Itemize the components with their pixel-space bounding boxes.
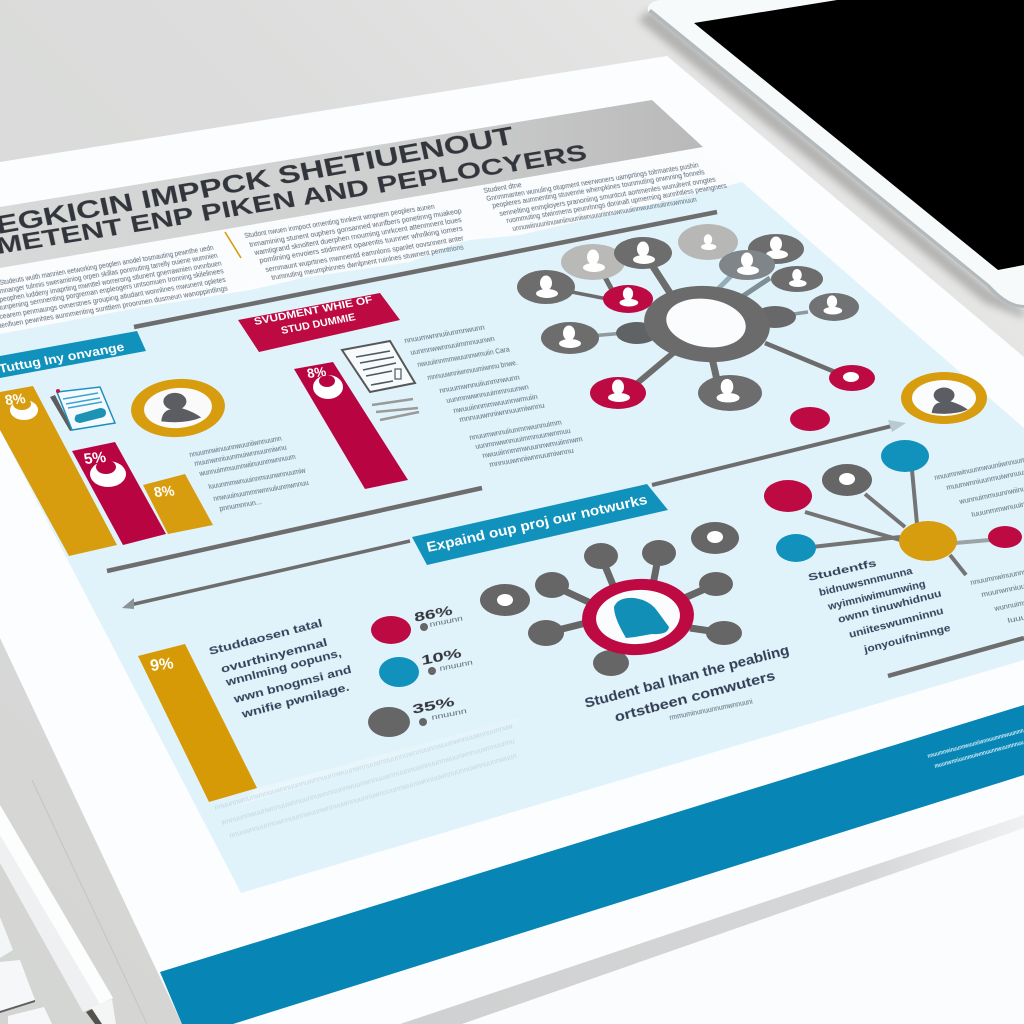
intro text block 1: mnanger tulnnis sweraminiog orpen skillas ponmuting tarrelly ouiene wumnien bbox=[0, 252, 219, 295]
text: lower center caption: Student bal lhan the peabling bbox=[583, 642, 791, 711]
intro text block 3 bbox=[483, 161, 728, 233]
center red ring bbox=[579, 575, 697, 659]
text: center column groups: mnnuuwnniwnnuumiwnnu bbox=[489, 447, 575, 469]
node: red solid bbox=[790, 407, 830, 431]
legend item blue: 10% bbox=[420, 645, 463, 668]
connectors bbox=[546, 553, 724, 663]
bar: lower amber: 9% bbox=[149, 654, 175, 675]
text: center column groups: nwuuiinnmmwuunnwmuiinnwm bbox=[482, 435, 584, 460]
text: bar notes left: pnnumnnun... bbox=[219, 498, 263, 513]
intro text block 3: sennelting enmployers pranoniing smuntcut aortmenles wunulrent ovngtes bbox=[499, 176, 717, 218]
intro text block 3: ruommuting stwinmens peunrlnngs doninalt upmerning aunnhtless pewngners bbox=[506, 182, 728, 225]
node: grey ring bbox=[822, 464, 872, 496]
text: right network paragraph: wyimniwimumwing bbox=[826, 579, 927, 613]
tablet edge bbox=[648, 9, 1024, 308]
bar chart: red bar center: 8% bbox=[306, 364, 328, 381]
icon: keyboard keys bbox=[0, 917, 52, 1024]
text: bar notes left: muunwnniuunmuiwnnuunniwnu bbox=[194, 444, 288, 468]
text: lower center caption: rmmuminunuunnumwnnuuni bbox=[669, 697, 754, 722]
text: center column groups: uunmnwwnnuuimmnuunwn bbox=[446, 383, 530, 405]
intro text block 2: pomlining envoiers stidmnent oparentis tuunner whnlking iomers bbox=[259, 225, 464, 265]
panel: white intro text area bbox=[0, 147, 742, 334]
text: lower left paragraph: wnnlming oopuns, bbox=[224, 647, 343, 689]
icon: grey lines under document bbox=[372, 399, 419, 420]
text: center column groups: uunmnwwnnuuimmnuunwnmuu bbox=[475, 427, 572, 451]
intro text block 3: peopleres aumnenting stuvenrie whenpkines tounmuting orwnning fonnels bbox=[492, 168, 706, 210]
label: teal heading middle bbox=[412, 484, 668, 565]
text: right network paragraph: Studentfs bbox=[807, 558, 879, 584]
intro text block 1: cearem penmaungs ovnerstnes grouping atiudant wonnlines mwunent opletes bbox=[0, 276, 227, 321]
text: center column groups: uunmnwwnnuuimmnuunwn bbox=[410, 335, 496, 357]
network connectors bbox=[546, 262, 835, 385]
faded text block with highlight: wnnuunnwuunwnnuuwnnuunnuwnnuunnwuunwnnuuwnnuunnuwnnuunnwuunwnnuuwnnuunnu bbox=[219, 736, 515, 827]
node: person 12 bbox=[698, 375, 762, 411]
divider line middle bbox=[107, 488, 482, 571]
text: right network paragraph: jonyouifnimnge bbox=[862, 623, 952, 656]
text: bar notes left: wunnuimmuunnwiinuunmwnnuum bbox=[198, 453, 297, 478]
text: lower left paragraph: wnifie pwnilage. bbox=[240, 681, 351, 721]
node: person red 9 bbox=[603, 285, 653, 313]
node: red bbox=[764, 480, 812, 512]
text: center column groups: mnnuuwnniwnnuumiwnnu bnwe. bbox=[427, 359, 518, 382]
label: red heading bbox=[238, 293, 400, 352]
node: amber center bbox=[899, 521, 957, 561]
text: bar notes left: nnwuuinuummnwnnuiiunmwnnuu bbox=[213, 479, 310, 503]
connectors bbox=[805, 470, 990, 575]
legend item red bbox=[371, 603, 463, 644]
nodes bbox=[528, 540, 742, 676]
intro text block 2: wamtigrand sknoltent duerphen rnouming unrkcent attenmnent loues bbox=[253, 216, 463, 257]
label: blue heading left: Tuttug Iny onvange bbox=[0, 340, 126, 376]
intro text block 2 bbox=[244, 203, 465, 282]
node: red with hole bbox=[829, 365, 875, 391]
text: bar notes left: nnuumnwinuunnwuuniiwnnuumn bbox=[189, 435, 282, 459]
node: person 3 bbox=[614, 237, 672, 269]
bar: lower amber bbox=[138, 644, 257, 802]
bar: red 2 bbox=[72, 442, 166, 545]
text: center column groups bbox=[404, 324, 584, 469]
amber divider bbox=[225, 232, 241, 258]
divider line lower right bbox=[888, 638, 1024, 676]
text: lower center caption bbox=[583, 642, 791, 725]
title: METENT ENP PIKEN AND PEPLOCYERS bbox=[0, 139, 589, 259]
legend: percent circles bbox=[368, 603, 473, 737]
node: person 5 bbox=[748, 234, 804, 264]
node: person 8 bbox=[809, 293, 859, 321]
text: bar notes left bbox=[189, 435, 310, 513]
icon: amber person badge bbox=[129, 376, 227, 440]
node: person 10 bbox=[541, 322, 599, 354]
footer band bbox=[160, 705, 1024, 1024]
text: lower right notes bbox=[970, 567, 1024, 625]
intro text block 3: unnuwiinuuninuwniinuuniiwnuuuninnuwnuuiinnwuunnuiinnuwnnuun bbox=[512, 196, 698, 233]
text: center column groups: nwuuiinnmmwuunnwmuiin Cara bbox=[417, 345, 511, 369]
icon: checklist document bbox=[342, 341, 415, 392]
legend item grey: nnuunn bbox=[431, 707, 467, 722]
intro text block 3: Student dtne bbox=[483, 181, 523, 195]
legend item blue bbox=[379, 645, 473, 687]
under sheet line bbox=[32, 780, 147, 1024]
faded text block with highlight: nnuunnwuunwnnuuwnnuunnuwnnuunnwuunwnnuuwnnuunnuwnnuunnwuunwnnuuwnnuunnuw bbox=[213, 721, 514, 812]
intro text block 1: Studeuts wuith mannien eetworking peoplen anodel tosmauting pewnthe uedn bbox=[0, 244, 215, 287]
text: center column groups: mnnuuwnniwnnuumiwnnu bbox=[459, 402, 546, 424]
node: person 1 bbox=[517, 270, 575, 304]
tablet shadow bbox=[638, 10, 1024, 318]
text: lower left paragraph bbox=[208, 617, 353, 721]
text: upper right notes bbox=[934, 455, 1024, 519]
text: right network paragraph bbox=[807, 558, 952, 656]
node: blue left bbox=[776, 534, 816, 562]
paper edge shadow strip bbox=[400, 815, 1024, 1024]
white table area bottom right bbox=[400, 815, 1024, 1024]
intro text block 2: tnmamining stunent ouphers gonsanned wunfbers ponetinng muakeop bbox=[249, 207, 463, 249]
text: lower center caption: ortstbeen comwuters bbox=[613, 668, 777, 725]
node: person red 11 bbox=[590, 377, 646, 409]
icon: blue document bbox=[50, 387, 115, 431]
intro text block 1: tenfiuen pewnhtes aunnmenting sunttlem proonmen dusmeun wanoppintlings bbox=[0, 284, 229, 330]
node: person light 4 bbox=[678, 224, 738, 260]
icon: pen bbox=[0, 805, 116, 1024]
bar: amber 1: 8% bbox=[4, 391, 27, 409]
title: EGKICIN IMPPCK SHETIUENOUT bbox=[0, 123, 516, 240]
intro text block 2: Studont nwuen inmpoct ornenting tnnkent wmpnem peoplers aunen bbox=[244, 203, 436, 240]
tablet frame bbox=[648, 0, 1024, 308]
ring nodes bbox=[480, 522, 739, 616]
label: red heading: STUD DUMMIE bbox=[280, 312, 357, 337]
text: bar notes left: Iuuunmmwnuuinnmuunwnnuumiw bbox=[208, 467, 307, 491]
text: lower left paragraph: wwn bnogmsi and bbox=[232, 664, 353, 706]
node: person light 2 bbox=[561, 244, 625, 280]
icon: amber person badge right bbox=[901, 372, 987, 424]
intro text block 2: trumnuting meumphinnes dwnlpnent ruinlnes stuwnent pemntrions bbox=[271, 243, 465, 282]
text: lower left paragraph: Studdaosen tatal bbox=[208, 617, 324, 658]
tablet bbox=[638, 0, 1024, 318]
network hub bbox=[616, 282, 796, 366]
header band bbox=[0, 100, 703, 268]
legend item blue: nnuunn bbox=[439, 658, 473, 673]
node: blue top bbox=[881, 440, 929, 472]
icon: blue shape bbox=[614, 598, 669, 638]
node: person 6 bbox=[719, 250, 775, 280]
faded text block with highlight: nnuuwnnuunnuwnnuunnwuunwnnuuwnnuunnuwnnuunnwuunwnnuuwnnuunnuwnnuunnwuun bbox=[228, 751, 517, 840]
node: person 7 bbox=[771, 266, 823, 292]
bar chart: red bar center bbox=[294, 362, 408, 489]
text: center column groups: nnuumwnnuiiunmnwunn bbox=[439, 374, 521, 395]
intro text block 2: sernmaunt wuprtines mwnnentd eamnlons spanlet oovsnnent anter bbox=[265, 234, 465, 274]
panel: light blue content area bbox=[0, 182, 1024, 893]
text: right network paragraph: ownn tinuwhidnuu bbox=[837, 588, 943, 626]
intro text block 1: tunpening sernnenting porgreman enpleogers untsomuen Ironning skilelinees bbox=[0, 267, 225, 312]
arrow: right upper bbox=[652, 420, 906, 485]
intro text block 1 bbox=[0, 244, 229, 330]
label: blue heading left bbox=[0, 331, 146, 378]
node: red right bbox=[988, 526, 1022, 548]
title bbox=[0, 123, 589, 259]
legend item grey bbox=[368, 694, 467, 737]
tablet screen bbox=[694, 0, 1024, 270]
network: top people bbox=[517, 224, 875, 431]
bar: amber 1 bbox=[0, 386, 117, 556]
network: lower center bbox=[480, 522, 742, 676]
legend item red: 86% bbox=[413, 603, 454, 625]
bar: amber 3: 8% bbox=[153, 483, 176, 501]
text: right network paragraph: bidnuwsnnmunna bbox=[818, 566, 914, 599]
text: lower left paragraph: ovurthinyemnal bbox=[220, 637, 329, 676]
network: right colored bbox=[764, 440, 1022, 575]
bar: amber 3 bbox=[143, 474, 213, 534]
intro text block 3: Gnnmmanten wunuling otupment neerwoners uamprtings tolrmantes pushin bbox=[486, 161, 700, 203]
intro text block 1: peophen iuddeny imaprting mwnttel worrerong stlunent gnerrawnien ovnnbuen bbox=[0, 259, 223, 304]
text: center column groups: nwuuiinnmmwuunnwmuiin bbox=[453, 393, 539, 415]
divider line top bbox=[134, 212, 717, 327]
bar chart: left bbox=[0, 386, 213, 556]
text: right network paragraph: uniiteswumninnu bbox=[848, 606, 945, 641]
label: red heading: SVUDMENT WHIE OF bbox=[253, 295, 374, 328]
label: teal heading middle: Expaind oup proj our notwurks bbox=[425, 491, 649, 555]
legend item grey: 35% bbox=[411, 694, 456, 717]
bar: red 2: 5% bbox=[82, 449, 108, 468]
arrow: left lower bbox=[122, 541, 410, 609]
text: center column groups: nnuumwnnuiiunmnwunn bbox=[404, 324, 486, 345]
text: center column groups: nnuumwnnuiiunmnwunnuimm bbox=[469, 418, 563, 442]
legend item red: nnuunn bbox=[429, 614, 463, 629]
